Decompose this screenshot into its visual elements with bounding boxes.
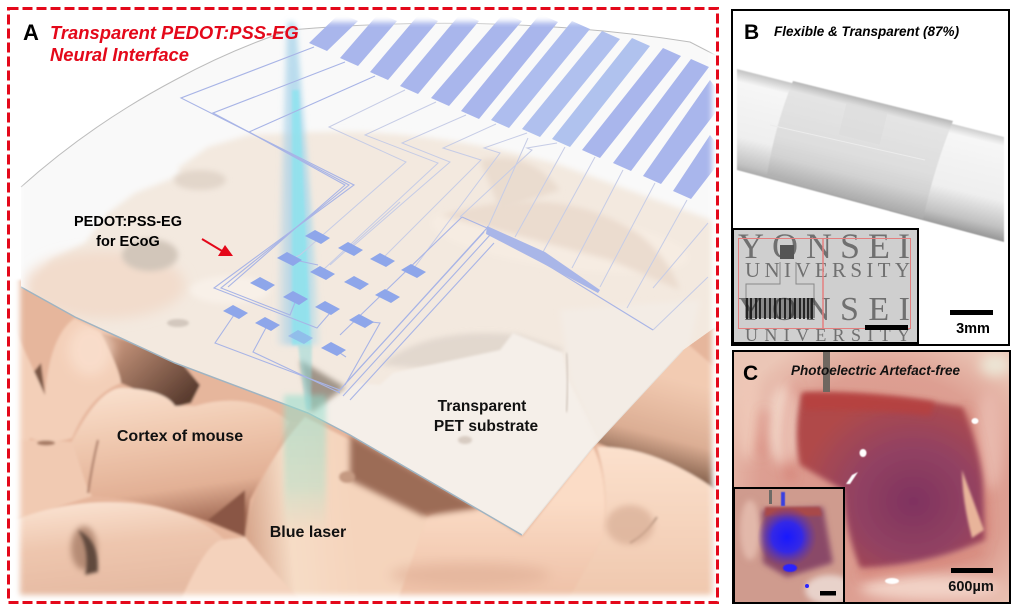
panel A title: Neural Interface <box>50 44 189 65</box>
transparent PET film <box>21 128 715 534</box>
label: blue laser: Blue laser <box>270 524 346 541</box>
conductive traces <box>181 47 708 400</box>
inset scale bar <box>820 591 836 596</box>
panel A soft white vignette <box>8 52 718 602</box>
label: PEDOT:PSS-EG for ECoG: PEDOT:PSS-EG <box>74 214 182 230</box>
panel B: flexible and transparent photo <box>732 10 1009 345</box>
YONSEI inset: UNIVERSITY <box>745 325 910 345</box>
tube photo <box>737 69 1004 242</box>
YONSEI inset: YONSEI <box>738 226 910 266</box>
label: PEDOT:PSS-EG for ECoG: for ECoG <box>96 234 160 250</box>
panel A: neural interface illustration <box>0 2 728 609</box>
blue laser beam <box>275 22 326 535</box>
panel C letter: C <box>743 362 758 385</box>
YONSEI inset: UNIVERSITY <box>745 258 910 282</box>
red streaks <box>760 385 985 575</box>
YONSEI inset <box>733 226 918 345</box>
light reflections <box>846 418 978 584</box>
panel A dashed red border <box>8 8 718 602</box>
cortex seen through the film <box>0 132 725 540</box>
panel B letter: B <box>744 21 759 44</box>
panel A letter: A <box>23 20 39 45</box>
panel B title: Flexible & Transparent (87%) <box>774 24 960 39</box>
label: cortex of mouse: Cortex of mouse <box>117 428 243 445</box>
fade at top of bars <box>328 13 581 26</box>
film outline <box>21 23 725 535</box>
red arrow to electrode array <box>202 239 233 256</box>
recording probe <box>823 352 830 392</box>
inset scale bar <box>865 325 908 330</box>
scale bar 600µm: 600µm <box>948 579 994 595</box>
scale bar 3mm <box>950 310 993 337</box>
mouse cortex <box>8 280 718 602</box>
panel C: cortex photograph <box>733 351 1010 605</box>
electrode contact bars <box>309 13 725 199</box>
inset: blue laser illumination <box>734 488 855 605</box>
YONSEI inset: YONSEI <box>738 291 910 328</box>
exposed cortex <box>796 393 985 568</box>
label: transparent PET substrate: Transparent <box>438 398 526 415</box>
bright tissue highlights <box>736 354 1010 601</box>
scale bar 600µm <box>948 568 994 595</box>
scale bar 3mm: 3mm <box>956 321 990 337</box>
label: transparent PET substrate: PET substrate <box>434 418 538 435</box>
electrode array pads <box>223 230 426 356</box>
transparent device on YONSEI logo <box>745 245 815 319</box>
panel A title: Transparent PEDOT:PSS-EG <box>50 22 299 43</box>
panel C title: Photoelectric Artefact-free <box>791 363 961 378</box>
